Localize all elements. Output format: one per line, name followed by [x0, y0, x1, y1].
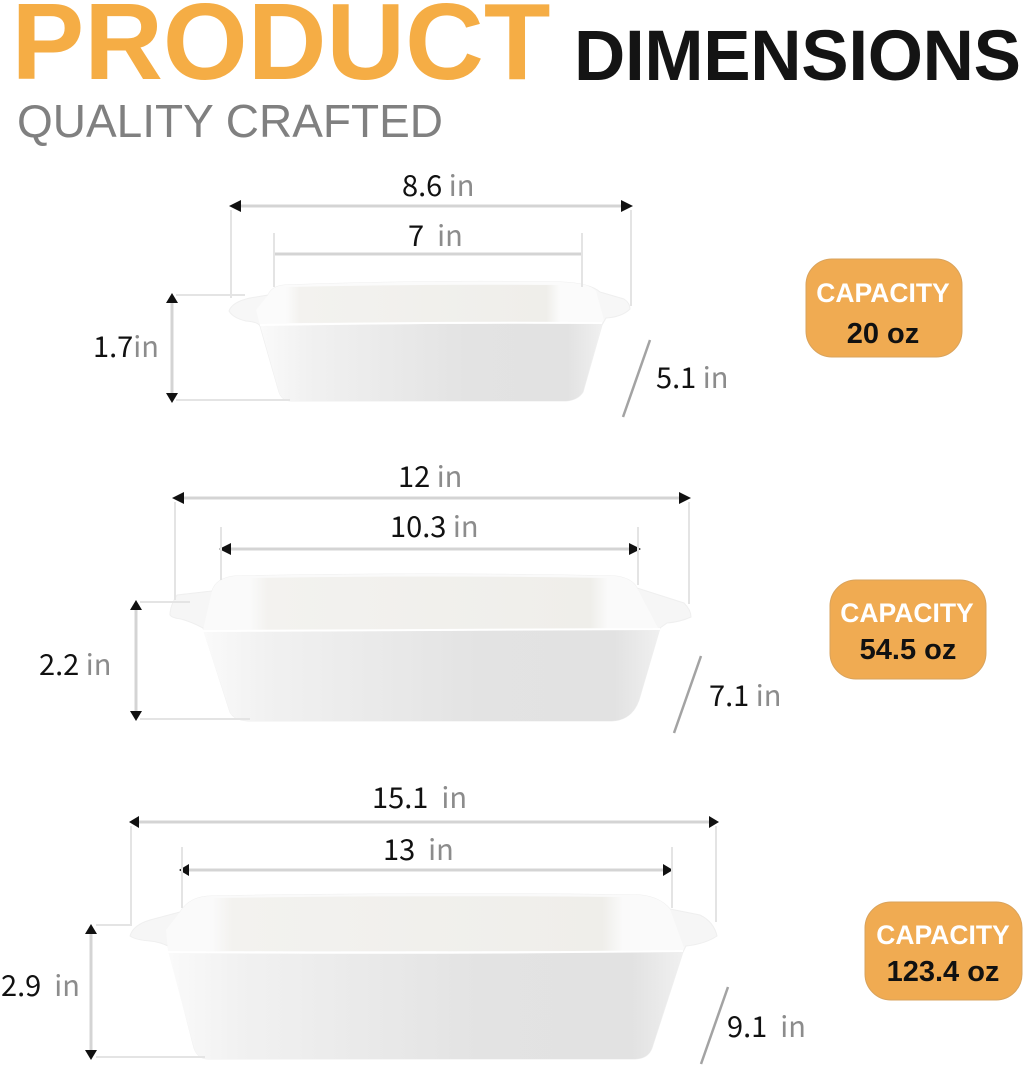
panel: medium dish [39, 454, 986, 733]
dimension: depth 7.1 in [674, 656, 781, 733]
dimension: outer width 15.1 in: 15.1 in [372, 775, 467, 817]
title: DIMENSIONS: DIMENSIONS [574, 17, 1021, 96]
dimension: outer width 8.6 in: 8.6 in [402, 163, 474, 205]
dimension: inner width 10.3 in: 10.3 in [390, 504, 479, 546]
dimension: outer width 8.6 in [229, 163, 633, 306]
dish image: large [130, 894, 717, 1059]
badge: capacity 20 oz: CAPACITY [816, 278, 950, 308]
dimension: inner width 13 in [179, 827, 673, 908]
dimension: inner width 10.3 in [219, 504, 641, 585]
dimension: depth 9.1 in [701, 987, 806, 1064]
badge: capacity 20 oz: 20 oz [847, 318, 919, 350]
dimension: height 2.2 in [39, 600, 250, 721]
dimension: depth 5.1 in [623, 340, 728, 417]
badge: capacity 123.4 oz: CAPACITY [876, 920, 1010, 950]
dimension: height 1.7 in [93, 293, 290, 403]
badge: capacity 20 oz [806, 259, 962, 357]
subtitle: quality crafted: QUALITY CRAFTED [17, 95, 443, 147]
dimension: outer width 15.1 in [129, 775, 719, 926]
badge: capacity 54.5 oz: CAPACITY [840, 598, 974, 628]
dimension: depth 9.1 in: 9.1 in [727, 1004, 806, 1046]
dimension: height 2.2 in: 2.2 in [39, 642, 111, 684]
dimension: depth 5.1 in: 5.1 in [656, 355, 728, 397]
panel: large dish [1, 775, 1022, 1064]
dimension: depth 7.1 in: 7.1 in [709, 673, 781, 715]
badge: capacity 123.4 oz [865, 902, 1022, 1000]
dish image: medium [170, 574, 691, 721]
dimension: outer width 12 in [172, 454, 691, 604]
badge: capacity 54.5 oz: 54.5 oz [860, 634, 956, 666]
dish image: small [229, 281, 630, 401]
dimension: inner width 13 in: 13 in [383, 827, 454, 869]
dimension: inner width 7 in: 7 in [408, 213, 463, 255]
badge: capacity 123.4 oz: 123.4 oz [887, 956, 999, 988]
dimension: height 1.7 in: 1.7in [93, 324, 159, 366]
dimension: inner width 7 in [274, 213, 582, 287]
panel: small dish [93, 163, 962, 417]
dimension: outer width 12 in: 12 in [398, 454, 462, 496]
badge: capacity 54.5 oz [830, 580, 986, 679]
dimension: height 2.9 in [1, 924, 205, 1060]
dimension: height 2.9 in: 2.9 in [1, 963, 80, 1005]
